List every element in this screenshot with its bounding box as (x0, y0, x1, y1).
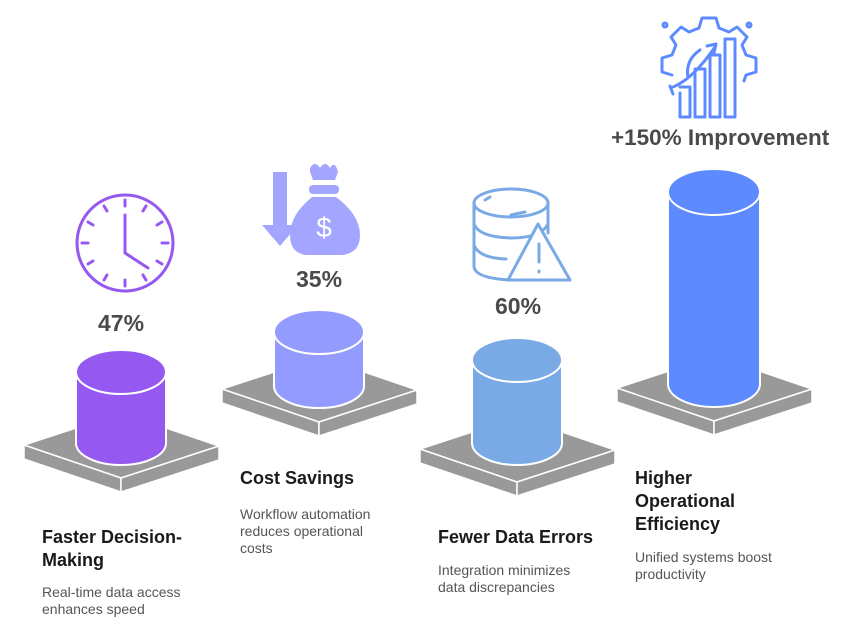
heading (635, 468, 735, 534)
description: reduces operational (240, 523, 363, 539)
icon: money bag with down arrow (262, 164, 360, 255)
icon: money bag with down arrow: $ (316, 212, 332, 243)
value: 47%: 47% (98, 310, 144, 336)
bar 3: platform and cylinder (420, 338, 615, 496)
description (635, 549, 772, 582)
icon: gear with growth chart (662, 18, 756, 117)
value: 35%: 35% (296, 266, 342, 292)
heading: Cost Savings (240, 468, 354, 488)
description (240, 506, 370, 556)
description: costs (240, 540, 273, 556)
heading: Efficiency (635, 514, 720, 534)
bar 2: platform and cylinder (222, 310, 417, 436)
description: Real-time data access (42, 584, 181, 600)
value: 60%: 60% (495, 293, 541, 319)
heading (42, 527, 182, 570)
value: +150% Improvement: +150% Improvement (611, 125, 829, 150)
description: data discrepancies (438, 579, 555, 595)
heading: Operational (635, 491, 735, 511)
description: Unified systems boost (635, 549, 772, 565)
text block: higher operational efficiency (635, 468, 772, 582)
description: productivity (635, 566, 706, 582)
description: enhances speed (42, 601, 145, 617)
description (438, 562, 570, 595)
text block: faster decision-making (42, 527, 182, 617)
bar 1: platform and cylinder (24, 350, 219, 492)
description: Integration minimizes (438, 562, 570, 578)
heading: Fewer Data Errors (438, 527, 593, 547)
description: Workflow automation (240, 506, 370, 522)
heading: Faster Decision- (42, 527, 182, 547)
icon: database with warning (474, 189, 570, 280)
bar 4: platform and cylinder (617, 169, 812, 435)
icon: clock (77, 195, 173, 291)
description (42, 584, 181, 617)
text block: fewer data errors (438, 527, 593, 595)
heading: Higher (635, 468, 692, 488)
heading: Making (42, 550, 104, 570)
text block: cost savings (240, 468, 370, 556)
